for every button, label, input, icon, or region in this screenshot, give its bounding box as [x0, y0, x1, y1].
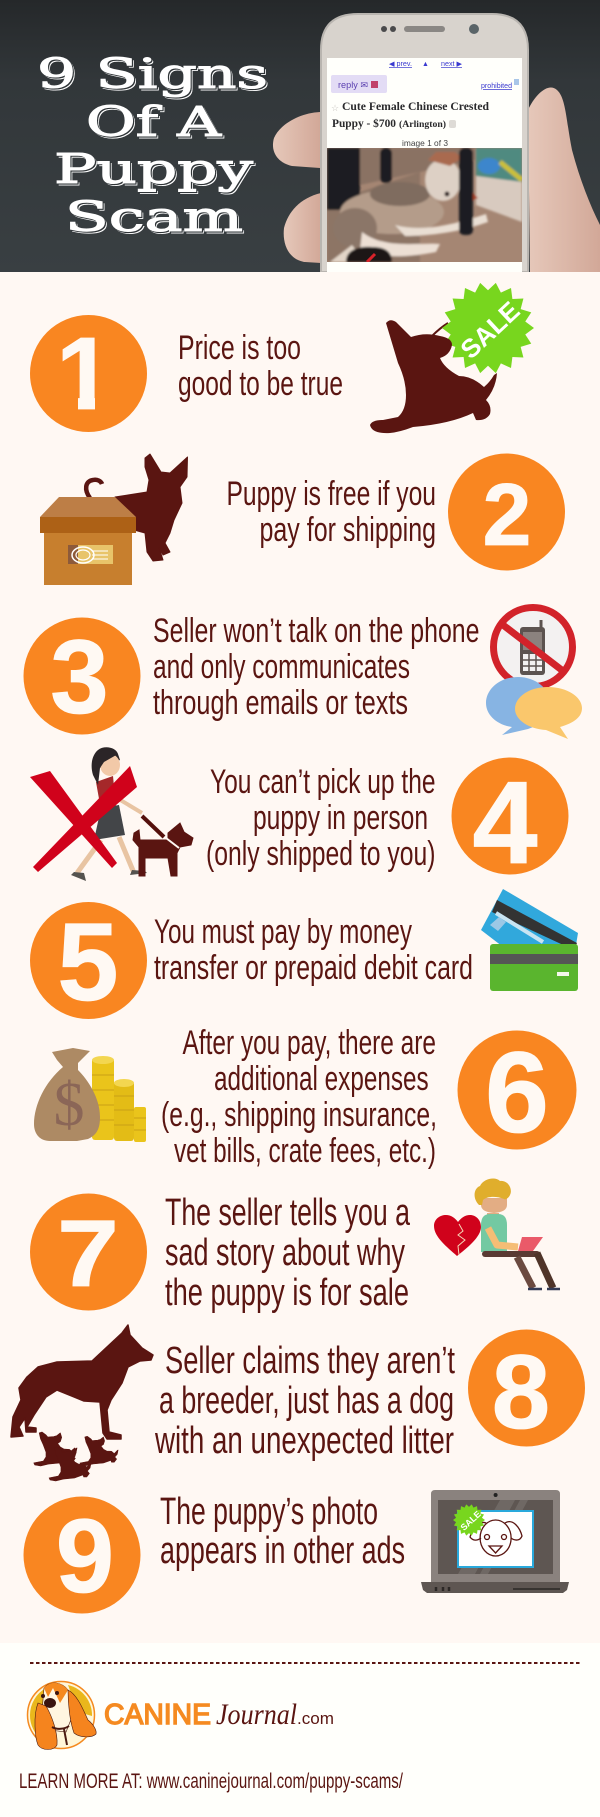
title: Scam — [66, 194, 244, 242]
title: Of A — [86, 98, 223, 146]
number 6: 6 — [485, 1029, 549, 1157]
phone screen: listing text: image 1 of 3 — [402, 138, 448, 148]
phone screen: listing text: Puppy - $700 — [332, 116, 396, 130]
icon: money bag and coins — [34, 1048, 146, 1142]
number 7: 7 — [57, 1201, 119, 1307]
sign 8 text: a breeder, just has a dog — [159, 1380, 454, 1422]
icon: broken heart and person on laptop — [434, 1179, 560, 1289]
hand: fingers and thumb — [273, 88, 600, 272]
panel: sign 5 — [30, 889, 578, 1024]
phone screen: listing text: reply ✉ — [338, 80, 368, 90]
phone screen: listing text: Cute Female Chinese Crested — [342, 99, 489, 113]
phone — [321, 14, 528, 272]
phone screen: listing text: next ▶ — [441, 61, 463, 68]
logo wordmark: Journal — [216, 1698, 297, 1731]
phone screen: listing text: ▲ — [422, 61, 429, 68]
sign 5 text: transfer or prepaid debit card — [154, 949, 473, 987]
panel: sign 9 — [24, 1490, 569, 1615]
title: Scam — [67, 195, 245, 243]
title: Puppy — [56, 147, 256, 195]
learn more link: LEARN MORE AT: www.caninejournal.com/puppy-scams/ — [19, 1770, 403, 1793]
icon: no phone with speech bubbles — [486, 608, 582, 739]
icon: laptop with puppy ad — [421, 1490, 569, 1593]
panel: sign 6 — [34, 1024, 576, 1170]
number circle 3 — [24, 618, 140, 734]
sign 6 text: After you pay, there are — [182, 1024, 436, 1062]
panel: sign 2 — [40, 454, 565, 585]
title: Puppy — [55, 146, 255, 194]
logo wordmark — [104, 1698, 334, 1731]
sign 1 text: Price is too — [178, 329, 301, 367]
sign 5 text: You must pay by money — [154, 913, 412, 951]
logo dog badge — [28, 1682, 96, 1750]
sign 8 text: Seller claims they aren’t — [165, 1340, 455, 1382]
sign 6 text — [161, 1024, 437, 1170]
sign 9 text: appears in other ads — [160, 1530, 405, 1572]
icon: dog behind box — [40, 454, 188, 585]
number 5: 5 — [57, 901, 119, 1024]
sign 7 text — [165, 1192, 411, 1314]
title: Of A — [88, 100, 225, 148]
icon: money bag and coins: $ — [54, 1071, 84, 1139]
icon: dog with sale badge: SALE — [454, 295, 526, 365]
number 3: 3 — [50, 619, 109, 736]
sign 1 text — [178, 329, 343, 403]
panel: sign 7 — [30, 1179, 560, 1314]
panel: header — [0, 0, 600, 272]
panel: sign 4 — [30, 747, 568, 888]
sign 7 text: sad story about why — [165, 1232, 405, 1274]
number 9: 9 — [56, 1498, 114, 1615]
sign 4 text: puppy in person — [253, 799, 428, 837]
number 8: 8 — [492, 1334, 550, 1451]
sign 9 text: The puppy’s photo — [160, 1491, 378, 1533]
number circle 8 — [468, 1330, 585, 1446]
phone screen: listing text: prohibited — [481, 81, 512, 90]
phone screen: puppy photo — [327, 148, 522, 262]
sign 2 text: pay for shipping — [260, 511, 436, 549]
sign 3 text: Seller won’t talk on the phone — [153, 612, 480, 650]
title: 9 Signs — [38, 51, 269, 99]
sign 2 text — [226, 475, 436, 549]
sign 4 text: You can’t pick up the — [210, 763, 436, 801]
sign 9 text — [160, 1491, 405, 1572]
panel: sign 8 — [11, 1325, 585, 1481]
sign 6 text: vet bills, crate fees, etc.) — [174, 1132, 436, 1170]
panel: sign 3 — [24, 608, 582, 739]
icon: payment cards — [481, 889, 578, 991]
sign 8 text — [154, 1340, 455, 1462]
sign 4 text — [206, 763, 436, 873]
number circle 2 — [448, 454, 565, 570]
icon: woman walking dog crossed out — [30, 747, 193, 881]
footer background — [0, 1643, 600, 1817]
sign 8 text: with an unexpected litter — [154, 1420, 454, 1462]
icon: mother dog and puppies — [11, 1325, 153, 1481]
sign 6 text: additional expenses — [214, 1060, 429, 1098]
sign 4 text: (only shipped to you) — [206, 835, 436, 873]
number circle 7 — [30, 1194, 147, 1310]
title — [40, 56, 268, 234]
panel: sign 1 — [30, 283, 534, 433]
number 1: 1 — [56, 316, 113, 431]
title: 9 Signs — [39, 52, 270, 100]
sign 1 text: good to be true — [178, 365, 343, 403]
sign 5 text — [154, 913, 473, 987]
phone screen: listing text — [331, 61, 519, 148]
sign 2 text: Puppy is free if you — [226, 475, 436, 513]
number circle 1 — [30, 315, 147, 432]
footer divider — [30, 1662, 582, 1664]
logo wordmark: CANINE — [104, 1699, 211, 1731]
logo: Canine Journal — [28, 1682, 334, 1750]
number circle 5 — [30, 902, 147, 1019]
number circle 4 — [452, 758, 568, 874]
sign 6 text: (e.g., shipping insurance, — [161, 1096, 437, 1134]
number circle 9 — [24, 1496, 140, 1614]
logo wordmark: .com — [297, 1709, 334, 1728]
sign 3 text — [153, 612, 480, 722]
title: Scam — [65, 193, 243, 241]
sign 7 text: The seller tells you a — [165, 1192, 411, 1234]
icon: laptop with puppy ad: SALE — [458, 1509, 483, 1533]
title: 9 Signs — [37, 50, 268, 98]
phone screen: listing text: ◀ prev. — [389, 61, 412, 68]
number 4: 4 — [472, 757, 538, 888]
number circle 6 — [458, 1030, 576, 1150]
sign 3 text: and only communicates — [153, 648, 410, 686]
phone screen: listing text: ☆ — [331, 103, 339, 113]
phone screen: listing text: (Arlington) — [399, 119, 446, 130]
icon: dog with sale badge — [370, 283, 534, 433]
title: Of A — [87, 99, 224, 147]
sign 7 text: the puppy is for sale — [165, 1272, 409, 1314]
title: Puppy — [54, 145, 254, 193]
number 2: 2 — [483, 465, 531, 564]
sign 3 text: through emails or texts — [153, 684, 408, 722]
